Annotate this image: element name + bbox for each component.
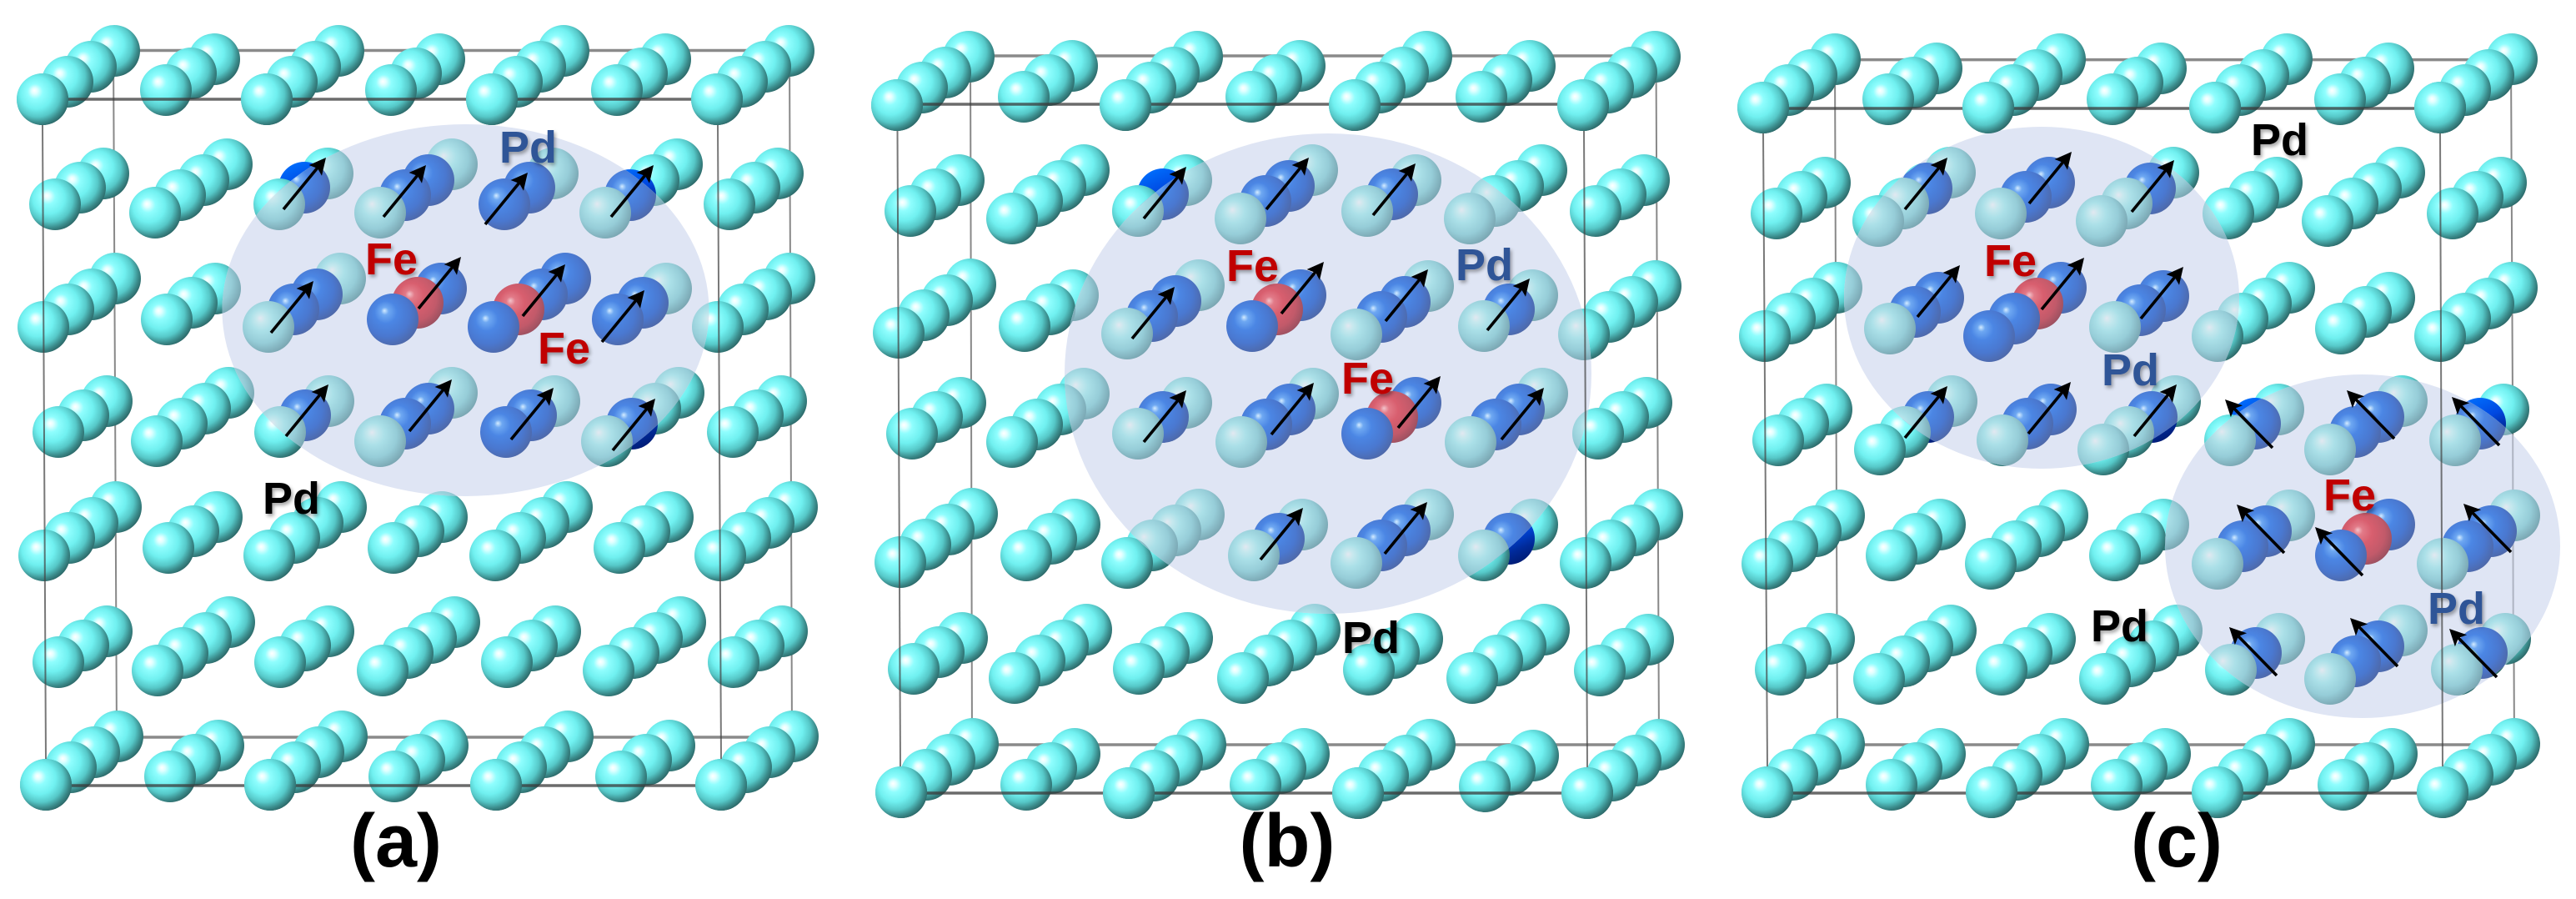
- front corner atoms: [871, 79, 1613, 819]
- polarisation clouds: [1844, 127, 2560, 718]
- spin arrows up-left: [2225, 390, 2511, 677]
- caption (c): (c): [2131, 800, 2223, 883]
- back edge of supercell box: [970, 56, 1659, 745]
- label: Pd black: Pd: [1342, 613, 1400, 663]
- Pd atom lattice: [871, 31, 1685, 819]
- label: Pd blue: Pd: [2428, 584, 2485, 634]
- panel: (c) two separate polarised clouds with opposite spins: [1737, 33, 2560, 883]
- atoms inside the cloud: [129, 138, 815, 581]
- front corner atoms: [1737, 82, 2468, 818]
- spin arrows: [1132, 158, 1544, 560]
- label: Pd black: Pd: [263, 474, 320, 524]
- spin arrows up-right: [1905, 152, 2183, 438]
- front edge of supercell box: [43, 99, 721, 786]
- label: Pd blue: Pd: [499, 123, 557, 173]
- caption (a): (a): [350, 800, 442, 883]
- polarisation cloud: [1065, 133, 1591, 614]
- Pd atom lattice: [1737, 33, 2540, 818]
- front edge of supercell box: [1763, 108, 2443, 793]
- caption (b): (b): [1240, 800, 1335, 883]
- label: Pd blue: Pd: [2102, 345, 2159, 395]
- front corner atoms: [17, 73, 747, 811]
- polarisation cloud: [222, 124, 709, 496]
- label: Pd black: Pd: [2091, 601, 2148, 651]
- panel: (b) two Fe atoms in a larger polarised Pd cloud: [871, 31, 1685, 883]
- spin arrows: [271, 158, 655, 450]
- label: Fe: Fe: [1341, 354, 1394, 404]
- back edge of supercell box: [113, 50, 792, 737]
- label: Fe: Fe: [538, 324, 590, 374]
- front edge of supercell box: [897, 104, 1587, 793]
- Pd atom lattice: [17, 25, 819, 811]
- label: Fe: Fe: [1226, 241, 1279, 291]
- atoms inside the clouds: [1739, 147, 2540, 718]
- label: Fe: Fe: [1984, 236, 2037, 286]
- panel: (a) two Fe atoms in one polarised Pd cloud: [17, 25, 819, 883]
- label: Pd black: Pd: [2251, 115, 2308, 165]
- atoms inside the cloud: [986, 144, 1681, 704]
- label: Pd blue: Pd: [1456, 240, 1513, 290]
- label: Fe: Fe: [2323, 470, 2376, 520]
- back edge of supercell box: [1835, 60, 2514, 745]
- label: Fe: Fe: [365, 234, 418, 284]
